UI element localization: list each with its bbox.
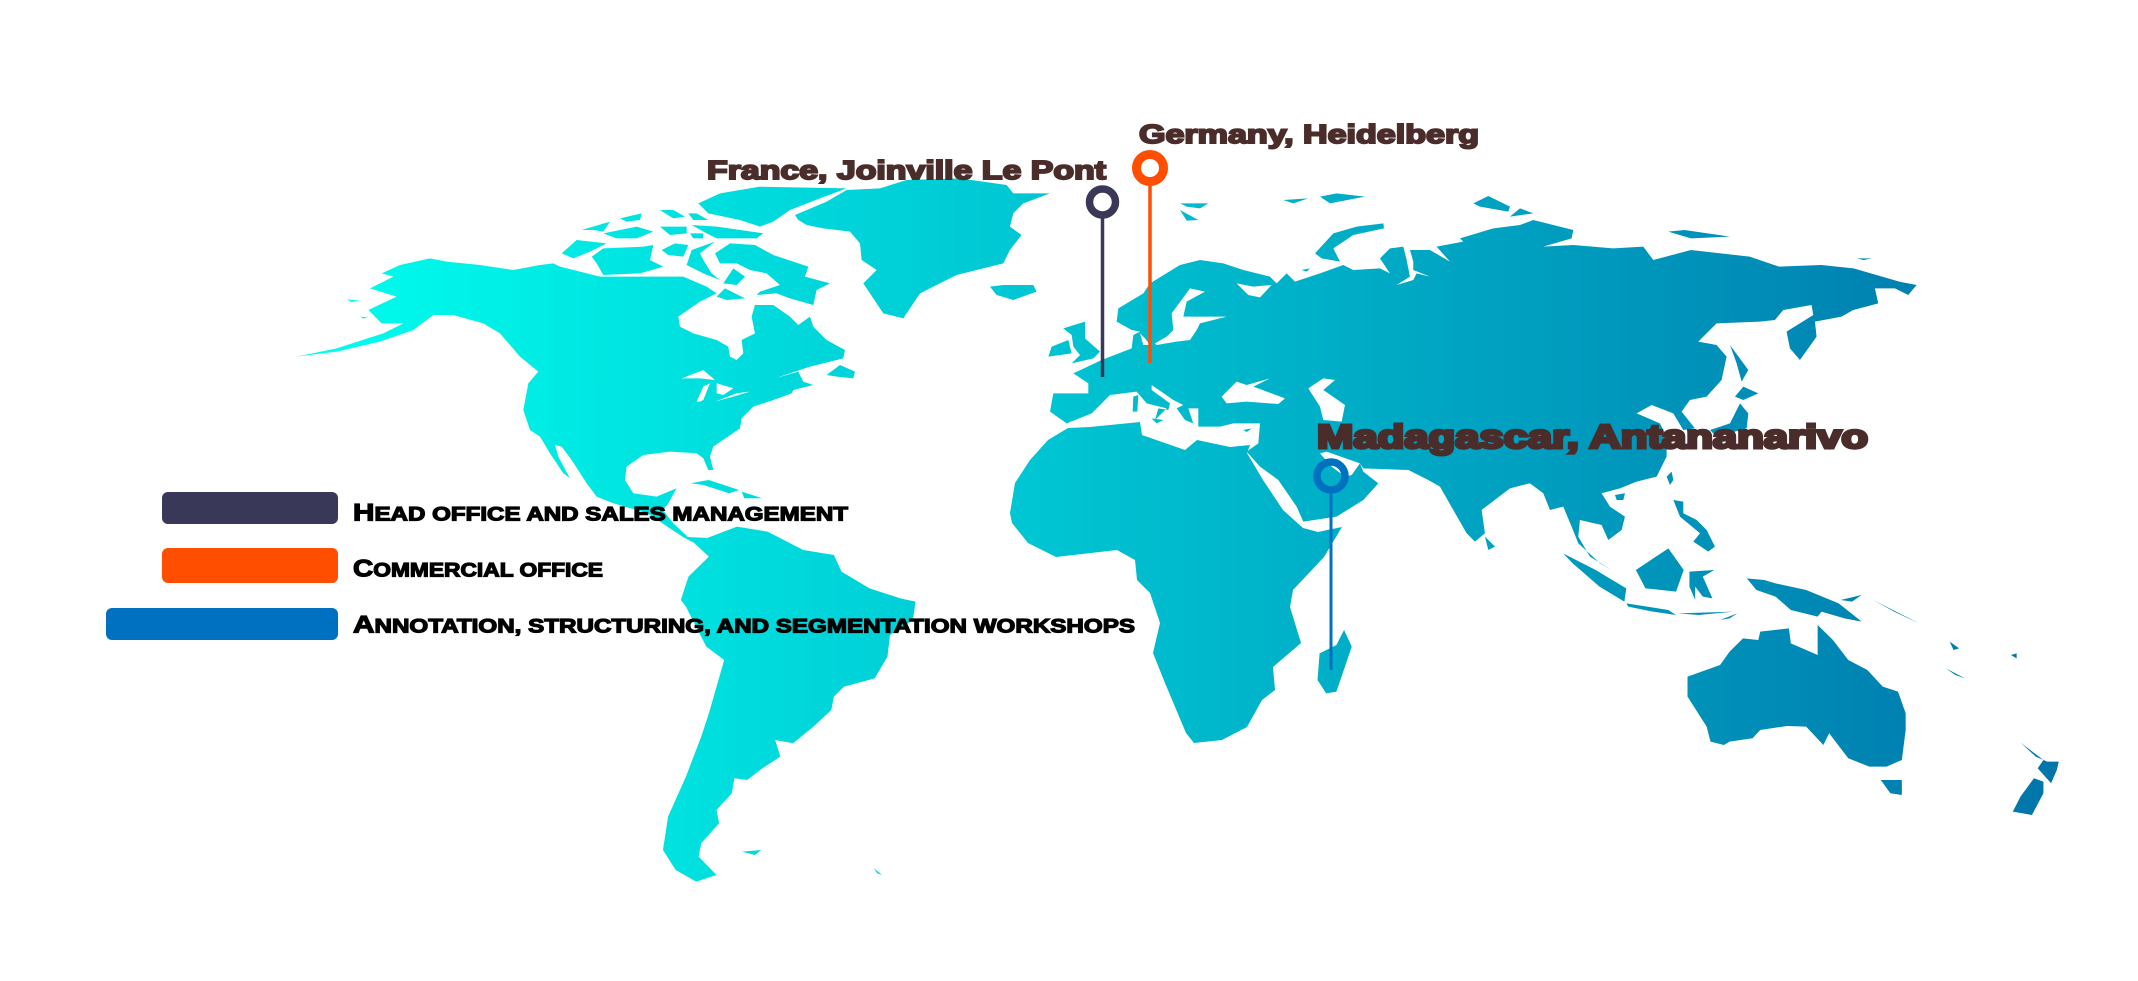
legend bar: workshops [106,608,338,640]
pin: France [1090,189,1116,377]
legend bar: head office [162,492,338,524]
label: France: France, Joinville Le Pont [707,155,1106,185]
legend text: workshops: ANNOTATION, STRUCTURING, AND SEGMENTATION WORKSHOPS [353,612,1135,638]
legend [106,492,1135,640]
legend text: commercial office: COMMERCIAL OFFICE [353,556,603,582]
label: Germany: Germany, Heidelberg [1139,119,1479,149]
legend text: head office: HEAD OFFICE AND SALES MANAGEMENT [353,500,848,526]
world map [290,175,2065,900]
label: Madagascar: Madagascar, Antananarivo [1317,418,1868,455]
legend bar: commercial office [162,548,338,583]
pin: Madagascar [1317,462,1345,670]
pin: Germany [1136,154,1164,363]
